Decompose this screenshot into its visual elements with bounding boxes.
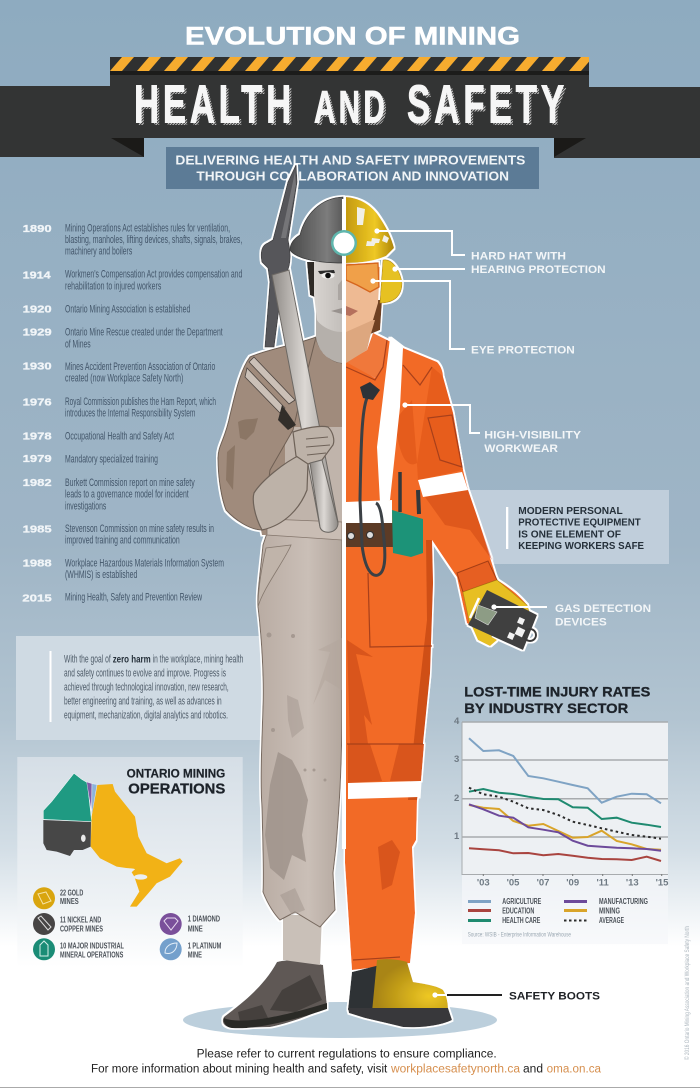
legend: diamond mine: MINE — [188, 925, 203, 934]
panel: PPE statement: PROTECTIVE EQUIPMENT — [518, 517, 641, 529]
legend: major industrial mineral operations: 10 MAJOR INDUSTRIAL — [60, 941, 124, 950]
y axis labels: 2 — [454, 793, 459, 804]
timeline entry 1976: Royal Commission publishes the Ham Report, which — [65, 396, 216, 408]
timeline entry 1988: 1988 — [23, 557, 52, 569]
x axis labels: '03 — [477, 878, 490, 889]
timeline entry 1988: (WHMIS) is established — [65, 569, 137, 581]
pick head — [261, 165, 297, 347]
legend: gold mines: 22 GOLD — [60, 888, 83, 897]
timeline entry 1982: investigations — [65, 500, 107, 512]
timeline entry 1890 — [23, 222, 242, 258]
reflective band waist — [346, 500, 392, 523]
left trouser leg — [258, 530, 342, 927]
chart legend: EDUCATION — [502, 906, 534, 915]
radio cable and microphone — [360, 382, 385, 575]
timeline entry 1890: 1890 — [23, 223, 52, 235]
x axis labels: '05 — [507, 878, 520, 889]
series: education — [469, 848, 661, 861]
footer note: workplacesafetynorth.ca — [390, 1064, 521, 1076]
footer note: For more information about mining health and safety, visit — [91, 1064, 388, 1076]
timeline entry 1985: Stevenson Commission on mine safety results in — [65, 523, 214, 535]
heading: health and safety: HEALTH — [134, 75, 295, 135]
timeline entry 1976: 1976 — [23, 396, 52, 408]
reflective stripe vertical — [377, 338, 403, 503]
timeline entry 2015 — [22, 592, 202, 605]
timeline entry 1920: Ontario Mining Association is established — [65, 303, 190, 315]
legend: diamond mine — [160, 913, 220, 935]
footer note — [91, 1048, 602, 1076]
callout: high-visibility workwear — [402, 402, 582, 455]
panel: zero harm statement: better engineering and training, as well as advances in — [64, 696, 222, 708]
timeline entry 1914: Workmen's Compensation Act provides compensation and — [65, 269, 242, 281]
timeline entry 1890: machinery and boilers — [65, 246, 133, 258]
plot area — [462, 722, 668, 876]
timeline entry 1929: 1929 — [23, 327, 52, 339]
legend: diamond mine: 1 DIAMOND — [188, 915, 220, 924]
suit shading — [408, 540, 433, 800]
reflective band knee — [348, 781, 420, 799]
timeline entry 1978: Occupational Health and Safety Act — [65, 431, 174, 443]
collar — [346, 333, 387, 378]
panel: Ontario mining operations — [17, 757, 243, 967]
collar left — [316, 337, 342, 363]
heading: Ontario mining operations — [127, 768, 225, 797]
timeline entry 1890: blasting, manholes, lifting devices, shafts, signals, brakes, — [65, 234, 242, 246]
panel: zero harm statement: in the workplace, mining health — [153, 654, 243, 666]
panel: PPE statement: MODERN PERSONAL — [518, 505, 623, 517]
bottom rule — [0, 1087, 700, 1088]
panel: zero harm statement: zero harm — [113, 655, 151, 666]
right suit — [345, 333, 527, 970]
heading: Ontario mining operations: ONTARIO MINING — [127, 768, 225, 780]
timeline entry 1914 — [23, 269, 242, 292]
left face — [314, 262, 342, 332]
chart legend: HEALTH CARE — [502, 916, 541, 925]
timeline entry 1979 — [23, 453, 158, 466]
chart source: Source: WSIB - Enterprise Information Warehouse — [468, 932, 571, 939]
chart title: LOST-TIME INJURY RATES — [464, 684, 650, 700]
timeline entry 2015: Mining Health, Safety and Prevention Review — [65, 592, 202, 604]
legend: platinum mine — [160, 938, 222, 960]
sleeve cuff — [457, 561, 497, 592]
subtitle box — [166, 147, 539, 189]
heading: health and safety: AND — [314, 82, 388, 133]
series: mining — [469, 805, 661, 850]
x axis labels: '13 — [626, 878, 639, 889]
center divider — [342, 199, 346, 849]
legend: platinum mine: MINE — [188, 950, 202, 959]
timeline entry 1978 — [23, 430, 174, 443]
right hard hat — [346, 197, 394, 263]
left neck — [316, 300, 342, 363]
legend: nickel and copper mines: COPPER MINES — [60, 924, 103, 933]
timeline entry 1930: Mines Accident Prevention Association of Ontario — [65, 361, 215, 373]
timeline entry 1929 — [23, 327, 223, 350]
chart title — [464, 684, 650, 716]
heading: health and safety: SAFETY — [410, 77, 570, 137]
callout: eye protection — [370, 278, 575, 357]
timeline entry 1985 — [23, 523, 214, 547]
legend: gold mines — [33, 887, 83, 909]
callout: hard hat with hearing protection: HEARING PROTECTION — [471, 264, 606, 276]
callout: safety boots — [432, 990, 600, 1002]
panel: zero harm statement: equipment, mechanization, digital analytics and robotics. — [64, 710, 228, 722]
panel: zero harm statement: With the goal of — [64, 654, 111, 666]
trouser stains — [265, 632, 326, 915]
timeline entry 1914: 1914 — [23, 270, 51, 282]
timeline entry 1929: of Mines — [65, 338, 91, 350]
footer note: and — [523, 1064, 543, 1076]
heading: health and safety: HEALTH — [136, 77, 298, 137]
timeline entry 1985: improved training and communication — [65, 535, 180, 547]
panel: PPE statement — [468, 490, 669, 564]
timeline entry 1920: 1920 — [23, 303, 52, 315]
y axis labels: 3 — [454, 754, 459, 765]
heading: health and safety — [134, 75, 570, 137]
belt — [346, 523, 394, 547]
right boot — [348, 959, 452, 1027]
footer note: Please refer to current regulations to ensure compliance. — [197, 1048, 497, 1060]
headlamp — [331, 230, 357, 256]
series: agriculture — [469, 738, 661, 803]
x axis labels: '09 — [566, 878, 579, 889]
title: evolution of mining: EVOLUTION OF MINING — [185, 22, 520, 50]
left hair — [307, 262, 318, 298]
footer note: oma.on.ca — [547, 1064, 602, 1076]
series: manufacturing — [469, 804, 661, 851]
timeline entry 1890: Mining Operations Act establishes rules for ventilation, — [65, 222, 230, 234]
copyright: © 2016 Ontario Mining Association and Workplace Safety North — [684, 926, 691, 1060]
timeline entry 1976 — [23, 396, 216, 420]
left sleeve — [218, 337, 316, 530]
pick handle — [272, 270, 338, 532]
left hard hat — [290, 197, 343, 263]
timeline entry 1988: Workplace Hazardous Materials Information System — [65, 557, 224, 569]
legend: nickel and copper mines — [33, 913, 103, 935]
legend: major industrial mineral operations — [33, 938, 124, 960]
x axis labels: '07 — [537, 878, 549, 889]
map of Ontario — [43, 773, 183, 907]
timeline entry 1920 — [23, 303, 190, 315]
series: health care — [469, 789, 661, 827]
callout: gas detection devices — [491, 603, 651, 628]
subtitle box: THROUGH COLLABORATION AND INNOVATION — [196, 170, 509, 184]
panel: PPE statement: KEEPING WORKERS SAFE — [518, 540, 644, 552]
chart: lost-time injury rates — [454, 684, 669, 944]
timeline — [22, 222, 242, 605]
callout: hard hat with hearing protection — [374, 228, 606, 276]
callout: safety boots: SAFETY BOOTS — [509, 990, 600, 1002]
timeline entry 1982: 1982 — [23, 477, 52, 489]
glove and gas detection device — [463, 580, 537, 650]
panel: zero harm statement: achieved through technological innovation, new research, — [64, 682, 229, 694]
timeline entry 1914: rehabilitation to injured workers — [65, 280, 162, 292]
callout: gas detection devices: DEVICES — [555, 616, 607, 628]
callout: high-visibility workwear: HIGH-VISIBILITY — [484, 430, 582, 442]
timeline entry 1982: leads to a governance model for incident — [65, 489, 189, 501]
x axis labels: '15 — [656, 878, 669, 889]
timeline entry 2015: 2015 — [22, 593, 52, 605]
legend: platinum mine: 1 PLATINUM — [188, 941, 222, 950]
timeline entry 1979: Mandatory specialized training — [65, 454, 158, 466]
timeline entry 1982: Burkett Commission report on mine safety — [65, 477, 195, 489]
callout: eye protection: EYE PROTECTION — [471, 345, 575, 357]
timeline entry 1930: 1930 — [23, 361, 52, 373]
legend: major industrial mineral operations: MINERAL OPERATIONS — [60, 951, 124, 960]
hearing protection — [380, 260, 402, 303]
chart legend: MINING — [599, 906, 620, 915]
chart legend backdrop — [462, 874, 668, 944]
banner ribbon — [0, 57, 700, 158]
callout: hard hat with hearing protection: HARD HAT WITH — [471, 250, 566, 262]
timeline entry 1978: 1978 — [23, 430, 52, 442]
panel: zero harm statement — [16, 636, 265, 740]
timeline entry 1976: introduces the Internal Responsibility System — [65, 408, 195, 420]
suit seams — [346, 340, 462, 960]
panel: PPE statement: IS ONE ELEMENT OF — [518, 528, 622, 540]
heading: health and safety: AND — [316, 84, 390, 135]
panel: zero harm statement: and safety continues to evolve and improve. Progress is — [64, 668, 226, 680]
chart legend: AVERAGE — [599, 916, 624, 925]
chart title: BY INDUSTRY SECTOR — [464, 700, 628, 716]
left torso — [255, 337, 342, 540]
subtitle box: DELIVERING HEALTH AND SAFETY IMPROVEMENTS — [175, 154, 525, 168]
sleeve reflective stripes — [245, 357, 295, 413]
timeline entry 1979: 1979 — [23, 453, 52, 465]
ground shadow — [183, 1002, 497, 1038]
x axis labels: '11 — [597, 878, 610, 889]
y axis labels — [454, 716, 460, 842]
gas detector radio — [392, 472, 423, 557]
illustration: miner, historic and modern — [218, 165, 537, 1028]
timeline entry 1985: 1985 — [23, 523, 52, 535]
timeline entry 1982 — [23, 477, 195, 512]
timeline entry 1929: Ontario Mine Rescue created under the Department — [65, 327, 223, 339]
chart legend: AGRICULTURE — [502, 897, 542, 906]
heading: health and safety: SAFETY — [407, 75, 568, 135]
right face and neck — [346, 263, 382, 363]
timeline entry 1988 — [23, 557, 224, 581]
y axis labels: 4 — [454, 716, 460, 727]
left lower leg — [283, 915, 322, 965]
left boot — [223, 960, 327, 1028]
timeline entry 1930: created (now Workplace Safety North) — [65, 373, 183, 385]
x axis labels — [477, 878, 669, 889]
left forearm and fist — [253, 426, 338, 532]
callout: high-visibility workwear: WORKWEAR — [484, 443, 558, 455]
reflective band arm — [418, 472, 468, 497]
legend: gold mines: MINES — [60, 897, 79, 906]
chart legend: MANUFACTURING — [599, 897, 648, 906]
timeline entry 1930 — [23, 361, 215, 385]
y axis labels: 1 — [454, 831, 460, 842]
safety goggles — [346, 263, 379, 292]
heading: Ontario mining operations: OPERATIONS — [128, 780, 225, 797]
chart legend — [468, 897, 648, 925]
callout: gas detection devices: GAS DETECTION — [555, 603, 651, 615]
series: average — [469, 788, 661, 839]
legend: nickel and copper mines: 11 NICKEL AND — [60, 915, 101, 924]
